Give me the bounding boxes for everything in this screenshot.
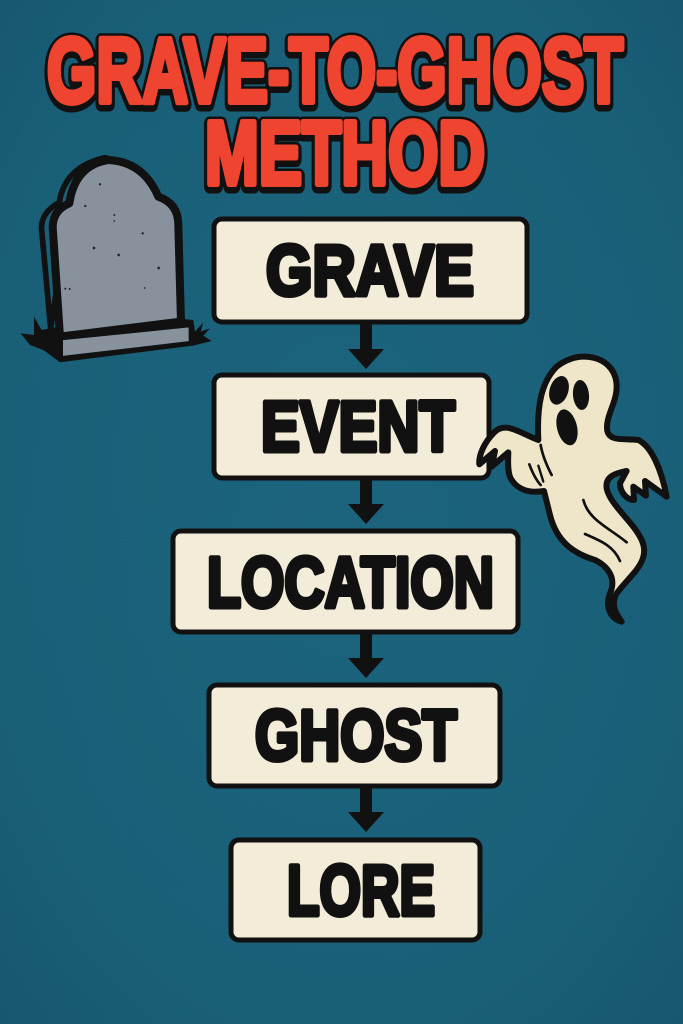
label: location: LOCATION [207, 544, 494, 623]
title line 2: METHOD [205, 104, 485, 204]
icon: tombstone [21, 158, 212, 362]
tombstone plinth [62, 326, 190, 357]
step box: location [173, 531, 518, 632]
label: lore: LORE [287, 852, 435, 931]
arrow: event to location [348, 478, 384, 524]
ghost left eye [546, 374, 572, 407]
tombstone grass and base shadow [21, 317, 212, 362]
title [47, 20, 623, 206]
step box: event [214, 375, 489, 478]
arrow: location to ghost [348, 632, 384, 678]
ghost fold lines [529, 445, 627, 561]
icon: ghost [479, 357, 667, 622]
label: grave: GRAVE [266, 232, 474, 311]
tombstone speckles [64, 183, 160, 290]
ghost body [479, 357, 667, 622]
label: ghost: GHOST [255, 697, 457, 776]
title line 2 outline: METHOD [205, 106, 485, 206]
ghost right eye [572, 379, 590, 411]
tombstone front slab [53, 160, 181, 337]
tombstone back slab [42, 158, 120, 328]
step box: grave [214, 219, 527, 322]
step box: ghost [209, 685, 500, 786]
ghost mouth [553, 407, 581, 448]
label: event: EVENT [261, 388, 455, 467]
arrow: ghost to lore [348, 786, 384, 832]
arrow: grave to event [348, 322, 384, 369]
step box: lore [231, 840, 480, 940]
